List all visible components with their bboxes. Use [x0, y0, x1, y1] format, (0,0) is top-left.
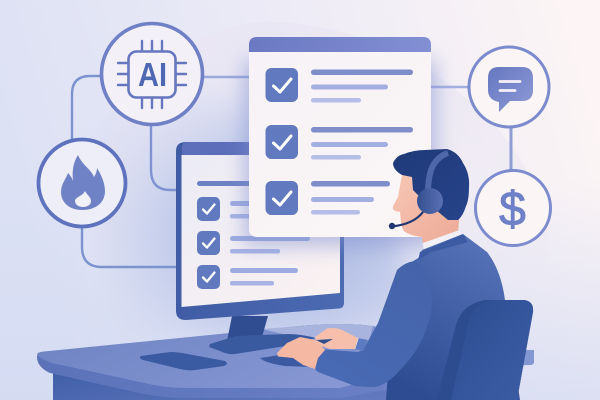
monitor header: [182, 142, 344, 155]
monitor frame: [176, 142, 344, 320]
icon: AI chip node: [102, 24, 202, 124]
monitor screen: [182, 155, 340, 307]
front hand: [277, 337, 325, 369]
panel row 2: [266, 125, 413, 160]
monitor checklist row 2: [197, 231, 310, 255]
panel row 3: [266, 181, 390, 215]
chair: [437, 300, 533, 400]
monitor base: [209, 334, 316, 354]
dollar sign: $: [499, 183, 526, 236]
mic tip: [389, 223, 395, 229]
neck and face: [393, 175, 460, 244]
lapel: [418, 234, 468, 260]
hair: [393, 149, 469, 220]
mic boom: [392, 212, 423, 226]
icon: chat node: [469, 47, 549, 127]
monitor: [176, 142, 344, 354]
cuff edge: [354, 338, 358, 349]
AI label: AI: [138, 56, 167, 93]
panel header: [249, 37, 431, 52]
arm: [315, 262, 432, 387]
floating checklist panel: [244, 37, 436, 246]
tablet on desk: [140, 352, 227, 370]
monitor heading bar: [197, 181, 257, 186]
headset band: [428, 153, 448, 192]
monitor checklist row 1: [197, 197, 260, 221]
connector lines: [72, 76, 511, 267]
agent: [277, 149, 534, 400]
jacket torso: [386, 234, 520, 400]
icon: flame node: [38, 140, 126, 226]
desk: [37, 324, 480, 400]
back hand: [315, 328, 358, 349]
desk back highlight: [262, 324, 373, 345]
headset ear cup: [417, 188, 443, 214]
shirt collar: [423, 230, 463, 254]
desk stub behind chair: [500, 350, 534, 366]
monitor checklist row 3: [197, 265, 298, 289]
keyboard gap: [316, 339, 333, 344]
shirt cuff: [355, 338, 368, 351]
monitor stand: [227, 316, 268, 341]
icon: dollar node: [476, 170, 550, 246]
panel row 1: [266, 68, 413, 102]
mouse pad: [260, 355, 312, 367]
